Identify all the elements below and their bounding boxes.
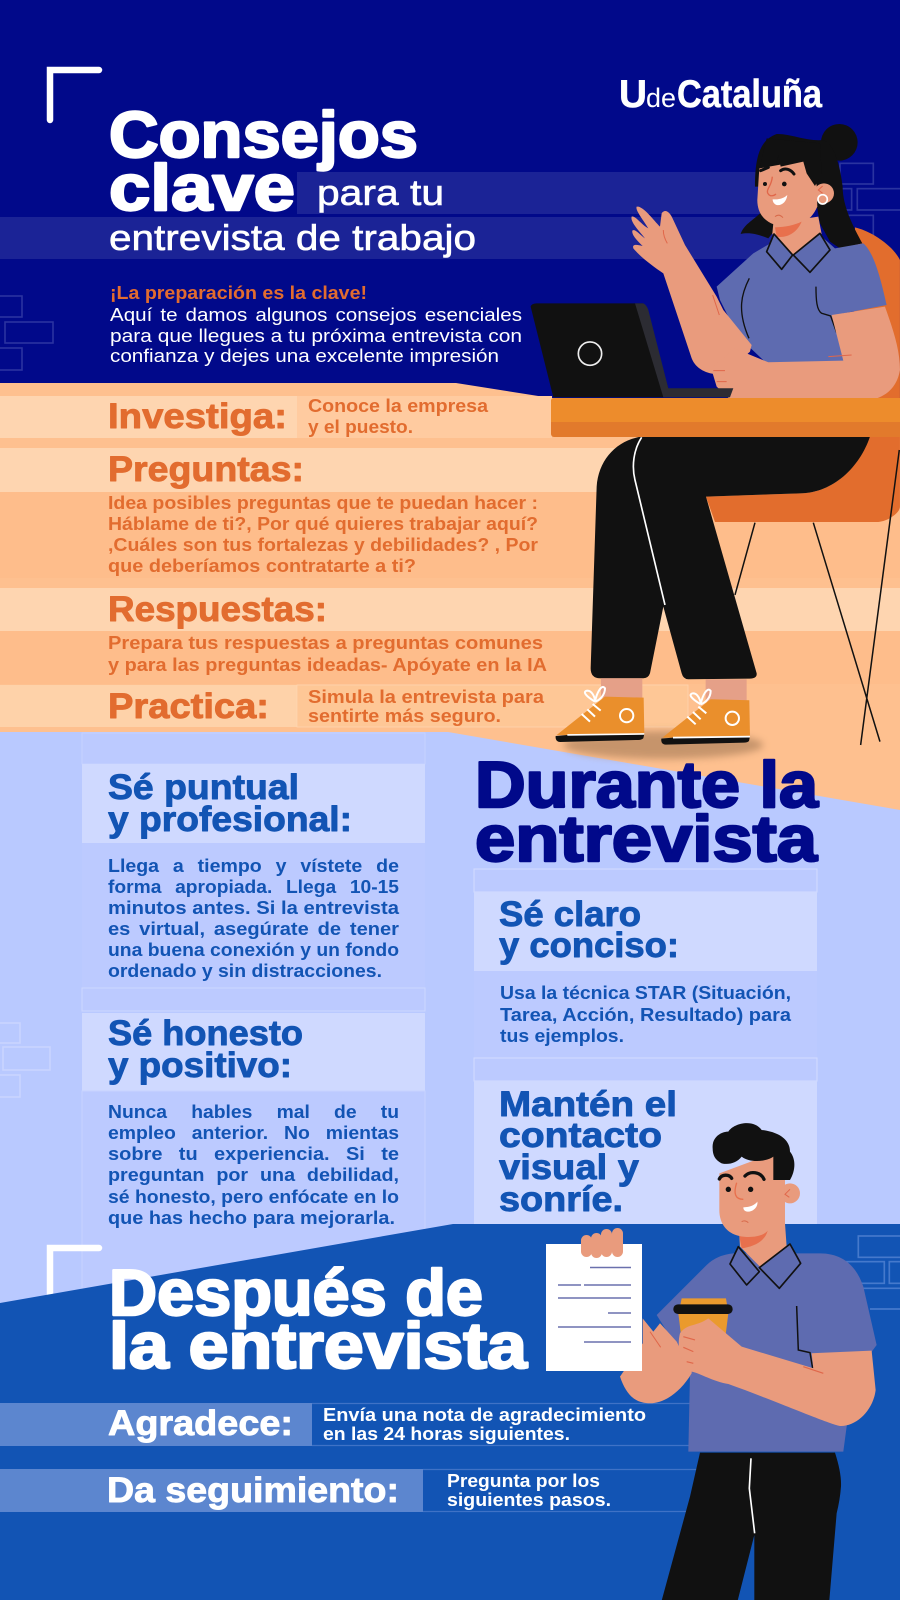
text: se puntual: minutos antes. Si la entrevista — [108, 897, 400, 918]
text: se honesto: Sé honesto — [108, 1013, 303, 1053]
sleeve seam — [797, 1306, 813, 1368]
card head: claro — [474, 892, 817, 971]
band: investiga label — [0, 396, 552, 438]
chair seat — [706, 437, 900, 522]
decorative bricks bottom right — [840, 1236, 900, 1309]
panel: blue after-interview section — [0, 1224, 900, 1600]
text: preguntas — [108, 449, 538, 576]
text: preguntas: Preguntas: — [108, 449, 304, 489]
illustration: woman lower body — [556, 437, 900, 759]
shirt — [717, 235, 887, 363]
text: manten contacto: Mantén el — [499, 1084, 677, 1124]
text: agradece — [108, 1403, 646, 1444]
text: manten contacto — [499, 1084, 677, 1219]
heading: despues de la entrevista: Después de — [109, 1256, 483, 1329]
neck shadow — [775, 222, 802, 237]
text: practica: Practica: — [108, 686, 269, 726]
card body: claro — [474, 971, 817, 1058]
chair legs — [735, 450, 899, 745]
text: se claro — [499, 894, 792, 1046]
text: se honesto: Nunca hables mal de tu — [108, 1101, 399, 1122]
text: se claro: tus ejemplos. — [500, 1025, 624, 1046]
forearm and hand — [679, 1318, 876, 1426]
text: se puntual: Llega a tiempo y vístete de — [108, 855, 399, 876]
card body: puntual — [82, 843, 425, 988]
document sheet — [546, 1244, 642, 1371]
band: respuestas body — [0, 631, 900, 684]
text: preguntas: ,Cuáles son tus fortalezas y debilidades? , Por — [108, 534, 538, 555]
trousers — [591, 437, 870, 679]
decorative bricks left middle — [0, 1023, 50, 1097]
arm crease — [650, 1332, 661, 1347]
title: Consejos — [109, 98, 418, 171]
text: respuestas: Respuestas: — [108, 589, 327, 629]
title band: entrevista de trabajo — [0, 217, 780, 259]
trouser stripe — [633, 437, 665, 605]
text: investiga: y el puesto. — [308, 416, 413, 437]
text: se honesto: sé honesto, pero enfócate en lo — [108, 1186, 399, 1207]
text: se puntual: y profesional: — [108, 799, 352, 839]
earring — [818, 195, 827, 204]
text: se puntual: es virtual, asegúrate de tener — [108, 918, 399, 939]
heading: despues de la entrevista — [109, 1256, 528, 1382]
logo: UdeCataluña — [619, 73, 822, 116]
text: se claro: y conciso: — [499, 925, 679, 965]
logo: UdeCataluña: Cataluña — [677, 73, 822, 116]
illustration: desk — [551, 398, 900, 437]
resting arm — [712, 307, 900, 399]
card head: honesto — [82, 1013, 425, 1091]
text: manten contacto: contacto — [499, 1115, 662, 1155]
text: se honesto: empleo anterior. No mientas — [108, 1122, 399, 1143]
collar — [767, 233, 830, 272]
background: navy header — [0, 0, 900, 800]
intro text: Aquí te damos algunos consejos esenciales — [110, 305, 522, 325]
text: respuestas — [108, 589, 547, 675]
text: manten contacto: visual y — [499, 1147, 639, 1187]
text: manten contacto: sonríe. — [499, 1179, 623, 1219]
text: investiga — [108, 395, 489, 437]
text: investiga: Conoce la empresa — [308, 395, 489, 416]
card body: honesto — [82, 1091, 425, 1291]
text: practica: sentirte más seguro. — [308, 705, 501, 726]
neck and face — [757, 160, 834, 256]
bangs — [755, 138, 822, 187]
title — [109, 98, 476, 258]
neck shadow — [739, 1231, 768, 1248]
hand holding document — [581, 1228, 623, 1258]
arm creases — [663, 230, 719, 315]
coffee cup — [673, 1298, 733, 1340]
left shoe — [556, 687, 644, 742]
holding arm — [620, 1318, 692, 1403]
illustration: woman upper body at laptop — [531, 124, 900, 400]
trouser stripe — [749, 1458, 755, 1533]
intro text: ¡La preparación es la clave! — [110, 283, 367, 303]
text: agradece: en las 24 horas siguientes. — [323, 1423, 570, 1444]
logo: UdeCataluña: de — [646, 83, 676, 113]
text: se puntual: Sé puntual — [108, 767, 299, 807]
floor shadow — [563, 731, 763, 759]
document lines — [558, 1268, 631, 1342]
heading: durante la entrevista: Durante la — [475, 748, 819, 821]
shirt seams — [742, 278, 837, 338]
text: se honesto — [108, 1013, 399, 1228]
band: preguntas body — [0, 492, 900, 578]
corner bracket top — [50, 70, 99, 120]
title band: para tu — [297, 172, 787, 214]
text: se puntual: forma apropiada. Llega 10-15 — [108, 876, 399, 897]
text: se honesto: y positivo: — [108, 1045, 292, 1085]
text: practica — [108, 686, 545, 726]
corner bracket bottom — [50, 1248, 99, 1310]
band: agradece — [0, 1403, 700, 1446]
text: investiga: Investiga: — [108, 396, 287, 436]
text: se honesto: que has hecho para mejorarla. — [108, 1207, 395, 1228]
text: preguntas: que deberíamos contratarte a ti? — [108, 555, 416, 576]
title: entrevista de trabajo — [109, 217, 476, 258]
gap band — [82, 988, 425, 1011]
text: da seguimiento: Da seguimiento: — [107, 1470, 399, 1510]
decorative bricks left top — [0, 296, 53, 370]
card head: puntual — [82, 764, 425, 843]
intro text — [110, 283, 522, 366]
card head: contacto — [474, 1081, 817, 1231]
text: da seguimiento — [107, 1470, 611, 1510]
text: preguntas: Idea posibles preguntas que te puedan hacer : — [108, 492, 538, 513]
text: respuestas: y para las preguntas ideadas- Apóyate en la IA — [108, 654, 547, 675]
text: practica: Simula la entrevista para — [308, 686, 545, 707]
hair back — [741, 124, 862, 248]
text: se puntual: ordenado y sin distracciones. — [108, 960, 382, 981]
text: da seguimiento: Pregunta por los — [447, 1470, 600, 1491]
title: clave — [109, 151, 295, 224]
face details — [761, 167, 823, 218]
text: se honesto: preguntan por una debilidad, — [108, 1164, 399, 1185]
shirt — [657, 1253, 877, 1452]
panel: left column — [82, 733, 425, 1291]
raised arm and hand — [631, 207, 752, 374]
text: se puntual: una buena conexión y un fondo — [108, 939, 399, 960]
laptop — [531, 303, 733, 397]
hand creases — [713, 355, 852, 382]
panel: peach preparation section — [0, 383, 900, 810]
text: se claro: Usa la técnica STAR (Situación, — [500, 982, 791, 1003]
illustration: man — [620, 1123, 877, 1600]
heading: despues de la entrevista: la entrevista — [109, 1309, 528, 1382]
ankles — [601, 678, 747, 702]
text: se puntual — [108, 767, 400, 981]
text: respuestas: Prepara tus respuestas a preguntas comunes — [108, 632, 543, 653]
chair back — [853, 227, 900, 400]
hair — [713, 1123, 794, 1180]
band: da seguimiento — [0, 1469, 700, 1512]
text: se claro: Sé claro — [499, 894, 641, 934]
band: preguntas header — [0, 448, 900, 492]
title: para tu — [317, 172, 444, 213]
text: da seguimiento: siguientes pasos. — [447, 1489, 611, 1510]
right shoe — [661, 690, 750, 745]
intro text: para que llegues a tu próxima entrevista con — [110, 326, 522, 346]
band: practica label — [0, 685, 688, 727]
hand creases — [683, 1337, 823, 1373]
face details — [719, 1173, 790, 1223]
background: light blue section — [0, 730, 900, 1330]
neck and head — [719, 1153, 800, 1267]
decorative bricks top right — [840, 163, 900, 236]
text: agradece: Agradece: — [108, 1403, 293, 1443]
intro text: confianza y dejes una excelente impresión — [110, 346, 499, 366]
panel: right column — [474, 869, 817, 1231]
trousers — [662, 1453, 841, 1600]
gap band — [474, 1058, 817, 1081]
text: preguntas: Háblame de ti?, Por qué quieres trabajar aquí? — [108, 513, 538, 534]
text: agradece: Envía una nota de agradecimiento — [323, 1404, 646, 1425]
heading: durante la entrevista — [475, 748, 819, 875]
band: respuestas header — [0, 588, 900, 631]
heading: durante la entrevista: entrevista — [475, 802, 818, 875]
logo: UdeCataluña: U — [619, 73, 647, 116]
collar — [730, 1244, 801, 1288]
text: se honesto: sobre tu experiencia. Si te — [108, 1143, 399, 1164]
text: se claro: Tarea, Acción, Resultado) para — [500, 1004, 792, 1025]
